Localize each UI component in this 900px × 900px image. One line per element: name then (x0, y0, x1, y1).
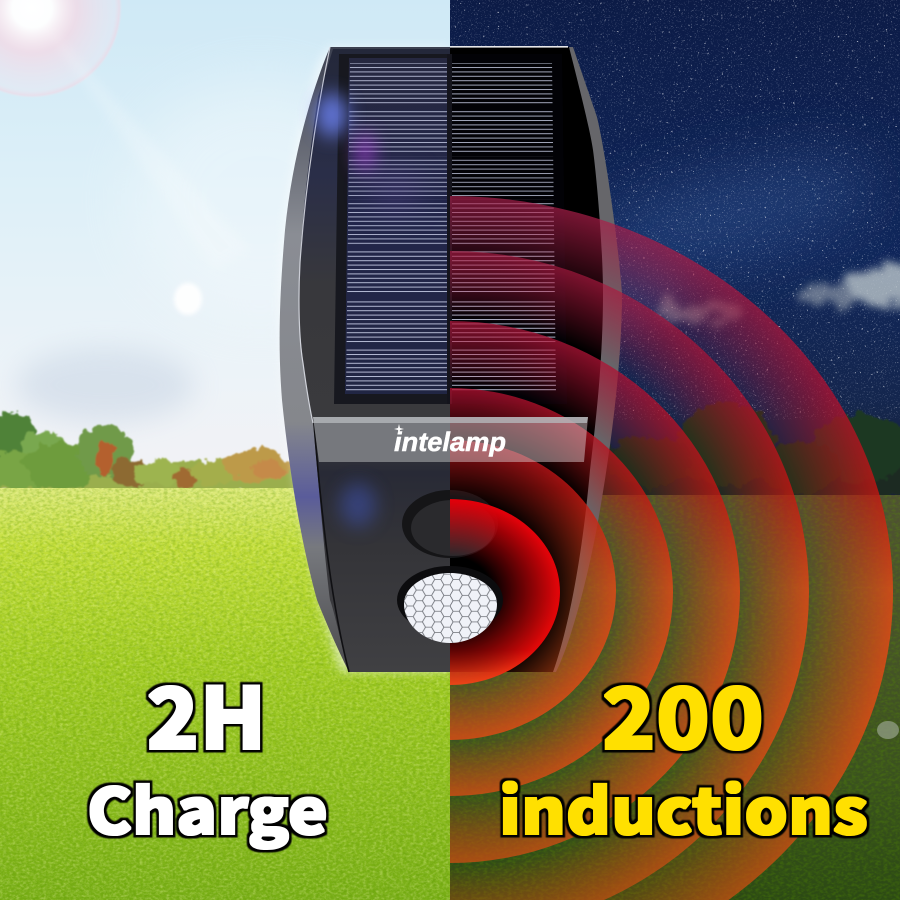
top edge highlight (450, 46, 568, 48)
daytime tree line (0, 412, 300, 492)
night tree line (602, 401, 900, 495)
Charge label: Charge (87, 762, 328, 853)
daytime grass field (0, 488, 450, 900)
solar panel cells left (345, 58, 450, 394)
lens flare orb (174, 283, 202, 315)
daytime sky background (0, 0, 450, 490)
charge time heading (87, 651, 328, 853)
night clouds (654, 265, 900, 322)
device inner left (299, 49, 450, 672)
solar cell lines (340, 63, 565, 391)
solar panel frame right (450, 54, 567, 404)
200 figure: 200 (602, 651, 764, 774)
speaker (402, 490, 498, 558)
sensor range rings (450, 190, 900, 900)
sun with lens halo (0, 0, 250, 270)
inductions label: inductions (499, 762, 868, 853)
logo bar (313, 417, 588, 462)
2H figure: 2H (146, 651, 266, 774)
lower body crease (314, 423, 349, 672)
panel centre divider (447, 54, 452, 404)
device glow on daytime side (280, 47, 450, 672)
night sky background (450, 0, 900, 500)
body edge highlight (299, 47, 330, 423)
PIR motion sensor dome (397, 566, 503, 646)
device rim left (280, 47, 450, 672)
night grass field (450, 495, 900, 900)
brand name: intelamp (394, 427, 506, 457)
device rim right (450, 47, 622, 672)
device inner right (450, 47, 603, 672)
solar lamp device (280, 46, 622, 672)
blue and purple lens flares (316, 93, 421, 527)
solar panel frame (334, 54, 450, 404)
inductions heading (499, 651, 868, 853)
logo sparkle (394, 424, 404, 434)
